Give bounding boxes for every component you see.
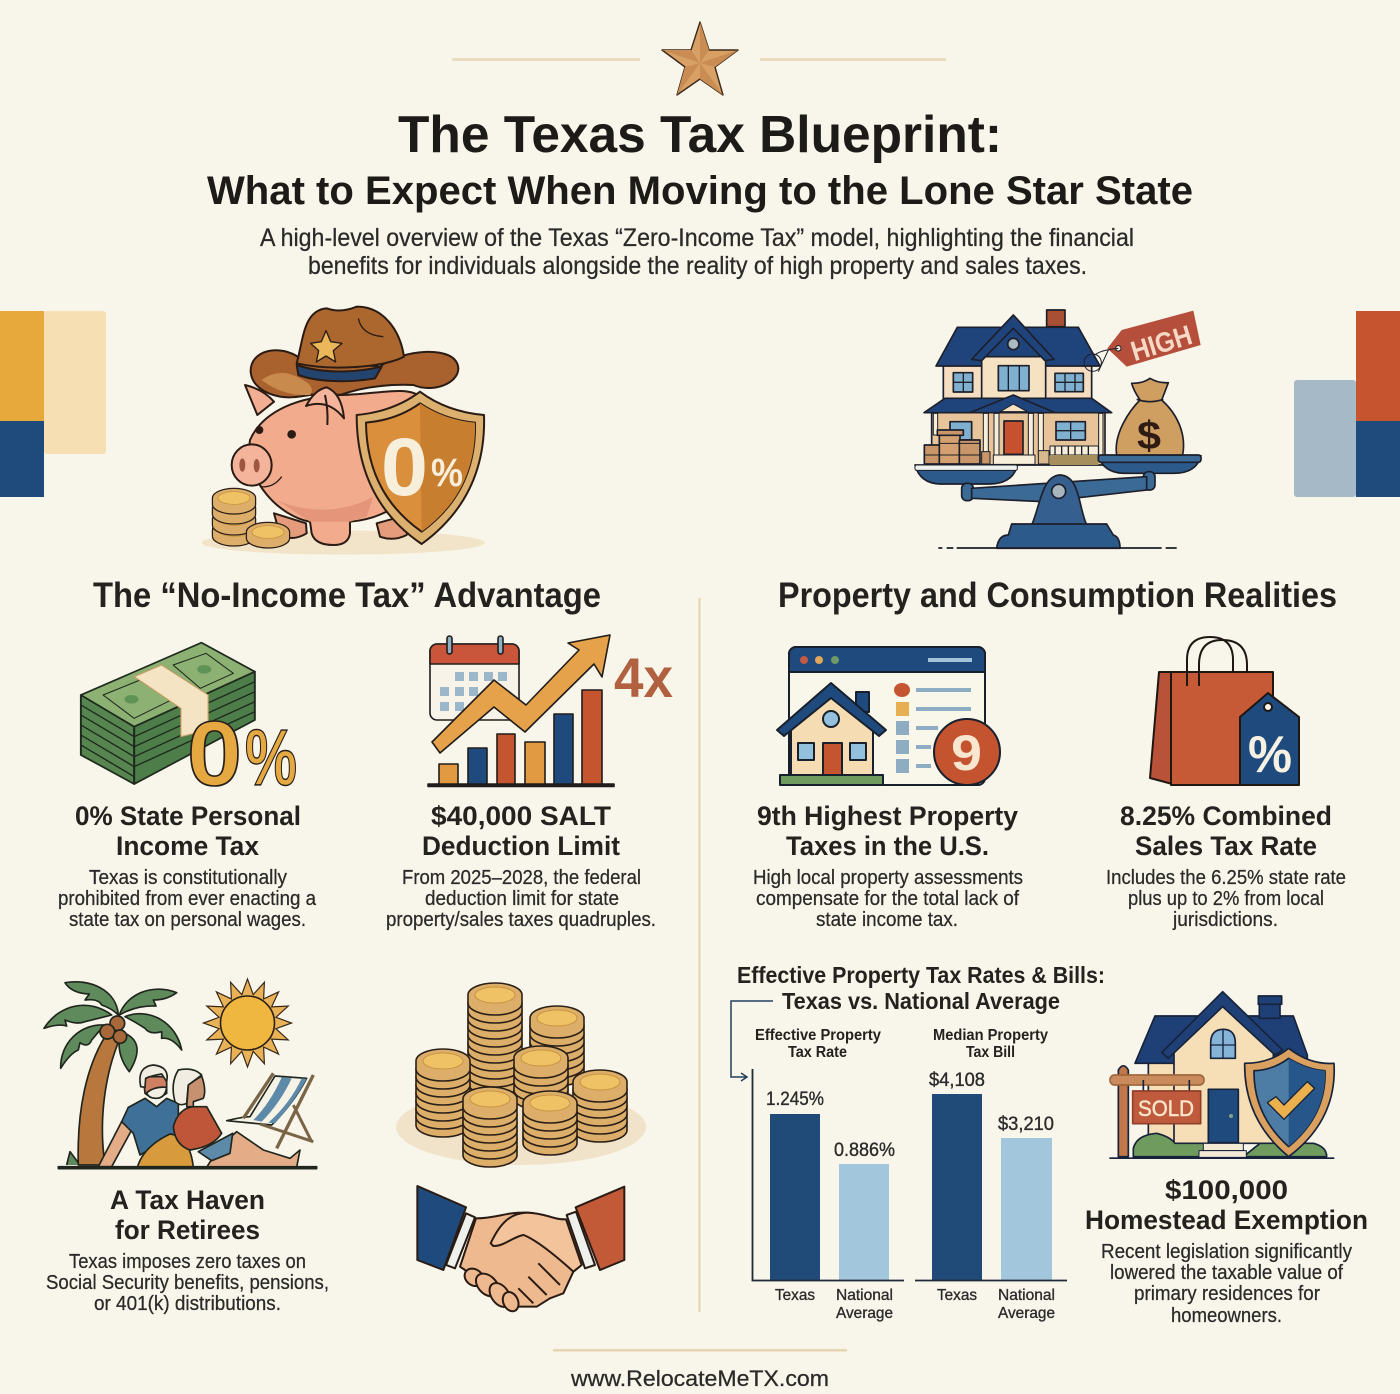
chart 2: median bill: Texas <box>937 1287 977 1304</box>
tag and bag labels: HIGH <box>1127 319 1196 367</box>
decorative star and rules <box>452 22 946 95</box>
chart 1: effective rate: Tax Rate <box>788 1044 847 1061</box>
badge 9: 9 <box>951 725 982 781</box>
chart 1: effective rate: National <box>836 1287 893 1304</box>
heading: property and consumption: Property and Consumption Realities <box>778 576 1337 615</box>
item: combined sales tax: plus up to 2% from local <box>1128 888 1324 910</box>
icon: coin stacks <box>396 983 646 1167</box>
item: 9th highest property taxes <box>753 801 1023 931</box>
tag and bag labels <box>1127 319 1196 458</box>
item: 9th highest property taxes: 9th Highest Property <box>757 801 1018 831</box>
item: homestead exemption: $100,000 <box>1165 1175 1288 1205</box>
item: 0% state personal income tax: Texas is constitutionally <box>89 867 287 889</box>
item: 9th highest property taxes: state income tax. <box>816 909 958 931</box>
tag and bag labels: $ <box>1137 414 1161 458</box>
tag percent: % <box>1248 726 1292 784</box>
icon: property listing window with 9 badge <box>777 647 1000 785</box>
icon: shopping bag with percent tag <box>1150 637 1299 785</box>
intro text: benefits for individuals alongside the reality of high property and sales taxes. <box>308 252 1087 280</box>
chart 2: median bill: Tax Bill <box>966 1044 1015 1061</box>
chart 1: effective rate: Average <box>836 1305 893 1322</box>
right colour blocks <box>1294 311 1400 497</box>
item: combined sales tax: Includes the 6.25% state rate <box>1106 867 1346 889</box>
icon: sold house with shield: SOLD <box>1138 1096 1194 1121</box>
woman <box>207 1132 300 1167</box>
item: tax haven for retirees: or 401(k) distributions. <box>94 1293 281 1315</box>
item: SALT deduction limit <box>386 801 656 931</box>
item: 0% state personal income tax: state tax on personal wages. <box>69 909 306 931</box>
icon: stack of cash with 0% <box>81 643 297 805</box>
item: combined sales tax: jurisdictions. <box>1172 909 1278 931</box>
item: 0% state personal income tax: 0% State Personal <box>75 801 301 831</box>
chart title: Effective Property Tax Rates & Bills: <box>737 962 1105 988</box>
connector arrow <box>731 1001 773 1081</box>
heading: no-income tax: The “No-Income Tax” Advantage <box>93 576 601 615</box>
item: SALT deduction limit: deduction limit for state <box>425 888 619 910</box>
column divider <box>698 598 700 1312</box>
deck chair <box>227 1073 313 1148</box>
item: combined sales tax <box>1106 801 1346 931</box>
item: homestead exemption: Homestead Exemption <box>1085 1205 1368 1235</box>
item: 0% state personal income tax: prohibited from ever enacting a <box>58 888 317 910</box>
chart title: Texas vs. National Average <box>782 988 1060 1014</box>
icon: handshake <box>417 1186 624 1314</box>
item: 9th highest property taxes: Taxes in the U.S. <box>786 831 989 861</box>
item: SALT deduction limit: $40,000 SALT <box>431 801 612 831</box>
chart 1: effective rate: Effective Property <box>755 1027 881 1044</box>
chart 2: median bill: National <box>998 1287 1055 1304</box>
icon: stack of cash with 0%: % <box>245 713 297 802</box>
chart 1: effective rate: Texas <box>775 1287 815 1304</box>
item: 9th highest property taxes: High local property assessments <box>753 867 1023 889</box>
chart 2: median bill <box>915 1027 1067 1322</box>
item: tax haven for retirees: Texas imposes zero taxes on <box>69 1251 306 1273</box>
shield label 0%: 0 <box>381 422 428 513</box>
item: homestead exemption: primary residences for <box>1134 1283 1320 1305</box>
footer: www.RelocateMeTX.com <box>570 1366 829 1391</box>
icon: sold house with shield <box>1109 992 1334 1159</box>
chart 2: median bill: Median Property <box>933 1027 1048 1044</box>
chart 1: effective rate: 0.886% <box>834 1140 895 1161</box>
item: homestead exemption: homeowners. <box>1171 1305 1282 1327</box>
intro text: A high-level overview of the Texas “Zero-Income Tax” model, highlighting the financial <box>260 224 1134 252</box>
title <box>207 106 1193 213</box>
shield label 0% <box>381 422 463 513</box>
intro text <box>260 224 1134 280</box>
item: SALT deduction limit: property/sales taxes quadruples. <box>386 909 656 931</box>
sun <box>204 979 292 1067</box>
man <box>98 1122 132 1167</box>
chart 2: median bill: Average <box>998 1305 1055 1322</box>
item: tax haven for retirees: for Retirees <box>115 1215 260 1245</box>
item: combined sales tax: 8.25% Combined <box>1120 801 1332 831</box>
item: tax haven for retirees: Social Security benefits, pensions, <box>46 1272 329 1294</box>
small coin pile by piggy <box>212 488 290 548</box>
item: 0% state personal income tax: Income Tax <box>116 831 259 861</box>
icon: stack of cash with 0%: 0 <box>187 703 242 805</box>
bar chart: effective property tax rates and bills <box>731 962 1105 1322</box>
icon: piggy bank with hat and 0% shield <box>202 307 485 555</box>
item: SALT deduction limit: Deduction Limit <box>422 831 620 861</box>
icon: retirees on the beach <box>44 979 317 1169</box>
item: 9th highest property taxes: compensate for the total lack of <box>756 888 1019 910</box>
title: What to Expect When Moving to the Lone Star State <box>207 169 1193 213</box>
icon: house and money bag on scale <box>915 310 1201 548</box>
item: tax haven for retirees: A Tax Haven <box>110 1185 265 1215</box>
item: homestead exemption: lowered the taxable value of <box>1110 1262 1343 1284</box>
chart 2: median bill: $4,108 <box>929 1070 985 1091</box>
shield label 0%: % <box>431 451 463 495</box>
item: SALT deduction limit: From 2025–2028, the federal <box>402 867 641 889</box>
chart 2: median bill: $3,210 <box>998 1114 1054 1135</box>
item: 0% state personal income tax <box>58 801 317 931</box>
chart title <box>737 962 1105 1014</box>
title: The Texas Tax Blueprint: <box>398 106 1002 164</box>
label 4x: 4x <box>614 646 673 709</box>
chart 1: effective rate: 1.245% <box>766 1089 824 1110</box>
chart 1: effective rate <box>752 1027 904 1322</box>
icon: calendar, rising arrow and bars <box>428 635 614 786</box>
item: combined sales tax: Sales Tax Rate <box>1135 831 1317 861</box>
left colour blocks <box>0 311 106 497</box>
item: homestead exemption <box>1085 1175 1368 1327</box>
item: tax haven for retirees <box>46 1185 329 1315</box>
item: homestead exemption: Recent legislation significantly <box>1101 1241 1352 1263</box>
